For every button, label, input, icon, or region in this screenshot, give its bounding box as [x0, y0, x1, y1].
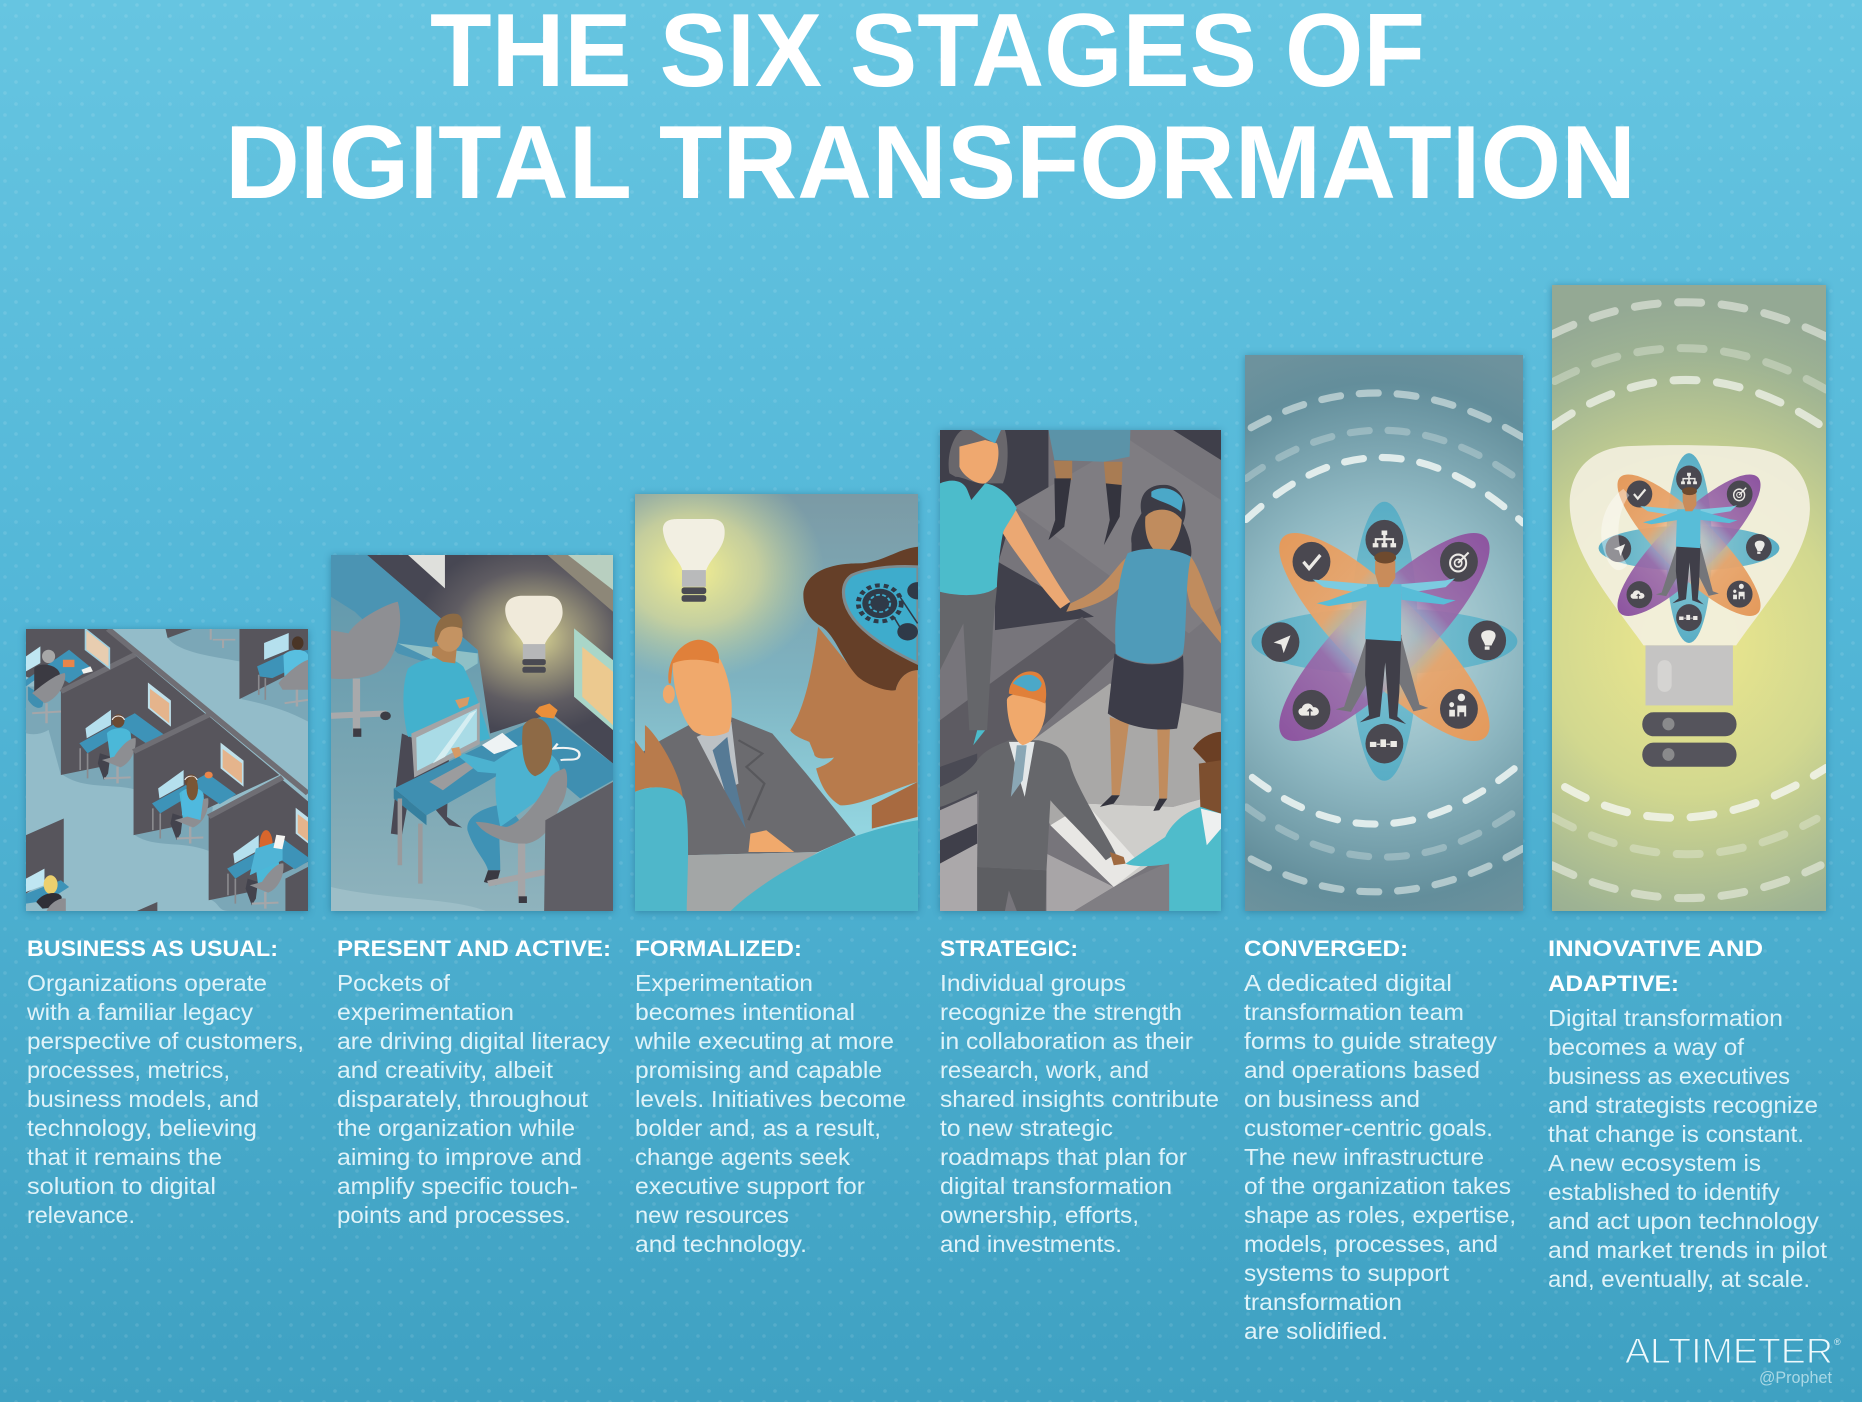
- body text: ownership, efforts,: [940, 1202, 1139, 1228]
- right woman: [1066, 485, 1221, 811]
- cubicle wall: [544, 782, 613, 911]
- body text: disparately, throughout: [337, 1086, 588, 1112]
- caption: formalized: [634, 936, 906, 1257]
- body text: A new ecosystem is: [1548, 1150, 1761, 1176]
- bottom workers: [26, 772, 308, 911]
- body text: [1548, 1005, 1827, 1292]
- top left woman: [940, 430, 1070, 745]
- body text: bolder and, as a result,: [635, 1115, 881, 1141]
- patterned floor: [940, 430, 1221, 911]
- body text: and investments.: [940, 1231, 1122, 1257]
- body text: established to identify: [1548, 1179, 1780, 1205]
- office chair: [331, 602, 400, 737]
- foreground figure: [635, 725, 918, 911]
- body text: becomes intentional: [635, 999, 855, 1025]
- body text: The new infrastructure: [1244, 1144, 1484, 1170]
- body text: and creativity, albeit: [337, 1057, 553, 1083]
- body text: and operations based: [1244, 1057, 1480, 1083]
- body text: executive support for: [635, 1173, 865, 1199]
- body text: and act upon technology: [1548, 1208, 1819, 1234]
- icon: light bulb: [663, 519, 725, 602]
- body text: recognize the strength: [940, 999, 1182, 1025]
- top right worker: [166, 629, 308, 707]
- body text: of the organization takes: [1244, 1173, 1511, 1199]
- centre man: [940, 671, 1116, 911]
- caption: business as usual: [26, 936, 304, 1228]
- dashed rings: [1552, 302, 1826, 898]
- body text: [1244, 970, 1516, 1344]
- heading: PRESENT AND ACTIVE:: [337, 936, 611, 961]
- panel: strategic illustration: [940, 430, 1221, 911]
- body text: shape as roles, expertise,: [1244, 1202, 1516, 1228]
- logo: Altimeter @ Prophet: ALTIMETER: [1625, 1332, 1833, 1371]
- body text: that change is constant.: [1548, 1121, 1804, 1147]
- caption: innovative and adaptive: [1548, 936, 1827, 1292]
- body text: Pockets of: [337, 970, 450, 996]
- body text: amplify specific touch-: [337, 1173, 578, 1199]
- body text: business as executives: [1548, 1063, 1790, 1089]
- body text: points and processes.: [337, 1202, 571, 1228]
- panel: converged illustration: [1245, 355, 1523, 911]
- body text: promising and capable: [635, 1057, 882, 1083]
- panel: formalized illustration: [635, 494, 918, 911]
- body text: new resources: [635, 1202, 789, 1228]
- heading: CONVERGED:: [1244, 936, 1408, 961]
- body text: are solidified.: [1244, 1318, 1388, 1344]
- body text: forms to guide strategy: [1244, 1028, 1497, 1054]
- heading: STRATEGIC:: [940, 936, 1078, 961]
- title: DIGITAL TRANSFORMATION: [225, 105, 1636, 221]
- profile figure with gears in head: [790, 547, 928, 829]
- body text: systems to support: [1244, 1260, 1449, 1286]
- heading: [1548, 936, 1763, 996]
- body text: solution to digital: [27, 1173, 216, 1199]
- body text: Experimentation: [635, 970, 813, 996]
- body text: with a familiar legacy: [26, 999, 253, 1025]
- body text: becomes a way of: [1548, 1034, 1744, 1060]
- body text: are driving digital literacy: [337, 1028, 610, 1054]
- panel: business as usual illustration: [26, 629, 308, 911]
- icon: light bulb: [505, 596, 563, 673]
- body text: and market trends in pilot: [1548, 1237, 1827, 1263]
- body text: digital transformation: [940, 1173, 1172, 1199]
- body text: Individual groups: [940, 970, 1126, 996]
- body text: perspective of customers,: [27, 1028, 304, 1054]
- body text: change agents seek: [635, 1144, 850, 1170]
- body text: Digital transformation: [1548, 1005, 1783, 1031]
- body text: and, eventually, at scale.: [1548, 1266, 1810, 1292]
- body text: research, work, and: [940, 1057, 1149, 1083]
- body text: Organizations operate: [27, 970, 267, 996]
- body text: technology, believing: [27, 1115, 257, 1141]
- icon: large light bulb: [1570, 445, 1810, 767]
- heading: FORMALIZED:: [635, 936, 802, 961]
- bottom right man: [1110, 732, 1221, 911]
- body text: while executing at more: [634, 1028, 894, 1054]
- body text: and technology.: [635, 1231, 807, 1257]
- standing man: [391, 614, 490, 835]
- body text: to new strategic: [940, 1115, 1113, 1141]
- back wall with glow: [367, 555, 613, 764]
- body text: transformation team: [1244, 999, 1464, 1025]
- body text: [26, 970, 304, 1228]
- body text: [337, 970, 610, 1228]
- panel: innovative and adaptive illustration: [1552, 285, 1826, 911]
- heading: ADAPTIVE:: [1548, 971, 1679, 996]
- bulb highlight: [1601, 489, 1629, 570]
- suited man: [635, 640, 856, 855]
- logo: Altimeter @ Prophet: @Prophet: [1759, 1368, 1832, 1387]
- wall schedule: [574, 628, 613, 730]
- dashed rings: [1246, 393, 1523, 892]
- heading: INNOVATIVE AND: [1548, 936, 1763, 961]
- logo: Altimeter @ Prophet: ®: [1834, 1337, 1841, 1347]
- body text: experimentation: [337, 999, 514, 1025]
- heading: BUSINESS AS USUAL:: [27, 936, 278, 961]
- top left worker: [26, 629, 109, 723]
- body text: models, processes, and: [1244, 1231, 1498, 1257]
- desk with computer: [394, 702, 613, 884]
- caption: present and active: [337, 936, 611, 1228]
- body text: aiming to improve and: [337, 1144, 582, 1170]
- top centre woman's legs: [1048, 430, 1130, 545]
- cubicle row: [26, 629, 354, 909]
- body text: relevance.: [27, 1202, 135, 1228]
- body text: roadmaps that plan for: [940, 1144, 1187, 1170]
- figure with petals and icons: [1251, 502, 1517, 781]
- body text: [940, 970, 1219, 1257]
- body text: that it remains the: [27, 1144, 222, 1170]
- body text: business models, and: [27, 1086, 259, 1112]
- body text: [634, 970, 906, 1257]
- seated woman: [451, 718, 567, 903]
- body text: in collaboration as their: [940, 1028, 1193, 1054]
- logo: Altimeter @ Prophet: [1625, 1332, 1841, 1387]
- body text: and strategists recognize: [1548, 1092, 1818, 1118]
- body text: the organization while: [337, 1115, 575, 1141]
- body text: transformation: [1244, 1289, 1402, 1315]
- body text: shared insights contribute: [940, 1086, 1219, 1112]
- caption: converged: [1244, 936, 1516, 1344]
- body text: A dedicated digital: [1244, 970, 1452, 996]
- figure with petals and icons: [1599, 453, 1779, 643]
- body text: on business and: [1244, 1086, 1420, 1112]
- body text: processes, metrics,: [27, 1057, 230, 1083]
- body text: customer-centric goals.: [1244, 1115, 1493, 1141]
- title: [225, 0, 1636, 221]
- body text: levels. Initiatives become: [635, 1086, 906, 1112]
- panel: present and active illustration: [331, 555, 613, 911]
- table: [685, 852, 818, 911]
- caption: strategic: [940, 936, 1219, 1257]
